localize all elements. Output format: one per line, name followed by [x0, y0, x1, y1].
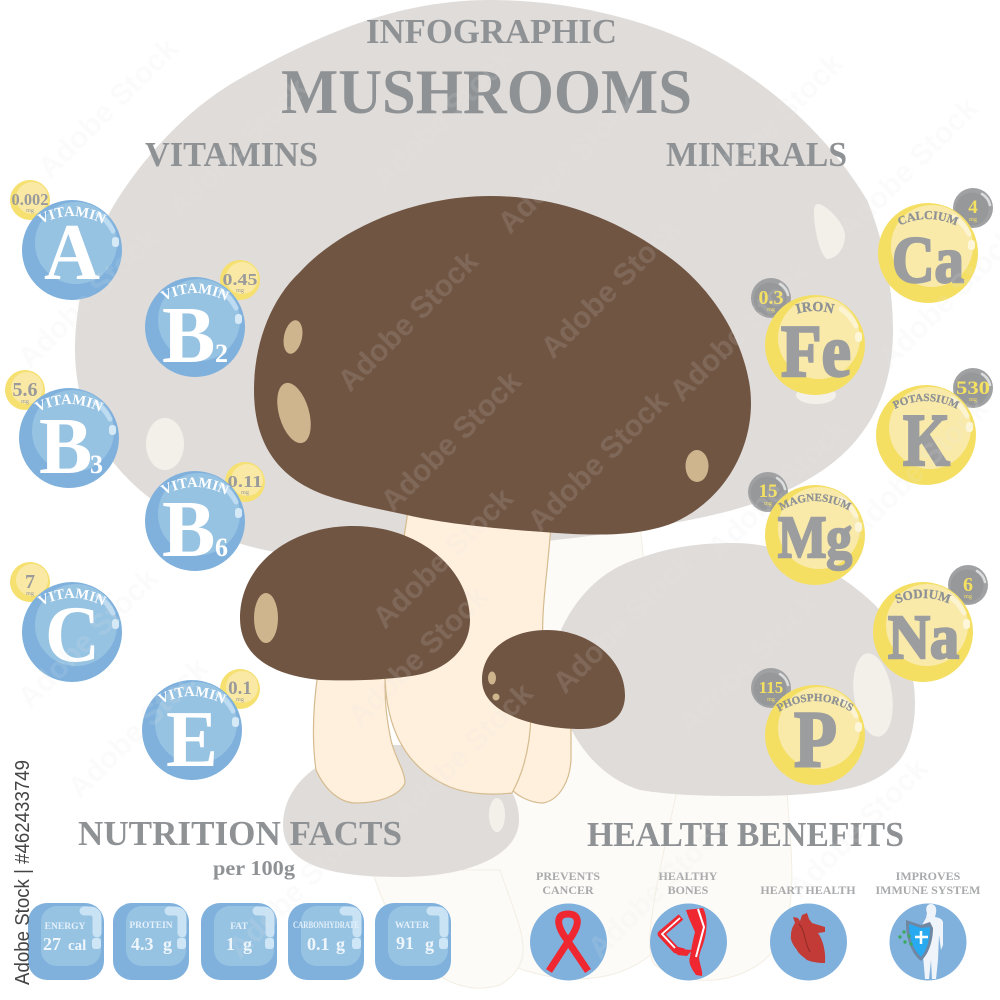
- mineral iron: IRON: [795, 302, 835, 314]
- heading: nutrition facts: NUTRITION FACTS: [78, 814, 402, 853]
- mineral calcium: 4: [968, 197, 978, 218]
- nutrition: energy: ENERGY: [45, 922, 85, 932]
- nutrition: carbohydrate: g: [336, 934, 345, 954]
- watermark: Adobe Stock: [375, 365, 528, 518]
- benefit: healthy bones: BONES: [668, 883, 709, 897]
- mineral phosphorus: P: [794, 696, 837, 784]
- benefit: immune system: IMPROVES: [896, 869, 961, 883]
- vitamin C: mg: [26, 591, 34, 597]
- vitamin E: E: [166, 696, 218, 784]
- heading: minerals: MINERALS: [666, 135, 847, 174]
- nutrition: carbohydrate: [288, 903, 364, 980]
- vitamin B2: 0.45: [222, 270, 258, 289]
- mineral phosphorus: PHOSPHORUS: [776, 694, 854, 712]
- nutrition: fat: FAT: [230, 922, 248, 932]
- vitamin B3: [5, 370, 119, 491]
- benefit: prevents cancer: CANCER: [542, 883, 594, 897]
- mineral iron: 0.3: [758, 287, 784, 309]
- vitamin B2: mg: [236, 288, 244, 294]
- right stem: [510, 720, 571, 803]
- watermark: Adobe Stock: [32, 32, 185, 185]
- nutrition: carbohydrate: CARBONHYDRATE: [293, 921, 359, 931]
- vitamin C: VITAMIN: [37, 588, 107, 606]
- title: [281, 12, 692, 127]
- nutrition: protein: PROTEIN: [129, 921, 173, 931]
- pale spots on grey caps: [146, 204, 898, 832]
- heading: vitamins: VITAMINS: [145, 135, 318, 174]
- benefit: heart health: HEART HEALTH: [760, 883, 856, 897]
- vitamin A: VITAMIN: [37, 206, 107, 224]
- vitamin B2: [145, 260, 260, 380]
- mineral sodium: SODIUM: [895, 589, 952, 604]
- mineral calcium: [878, 188, 993, 303]
- nutrition: water: 91: [396, 933, 414, 953]
- watermark: Adobe Stock: [842, 392, 995, 545]
- benefit: heart health: [760, 883, 856, 980]
- mineral iron: Fe: [781, 311, 851, 393]
- mineral potassium: mg: [969, 397, 977, 403]
- left small mushroom cap: [240, 526, 470, 680]
- mineral magnesium: mg: [764, 501, 772, 507]
- lower grey cap: [283, 745, 519, 877]
- watermark: Adobe Stock: [342, 580, 495, 733]
- vitamin A: A: [44, 209, 100, 297]
- mineral phosphorus: 115: [759, 678, 783, 697]
- tiny mushroom cap: [482, 630, 625, 729]
- large grey cap: [75, 0, 893, 554]
- watermark: Adobe Stock: [492, 87, 645, 240]
- vitamin A: 0.002: [12, 190, 48, 209]
- vitamin E: mg: [236, 697, 244, 703]
- mineral potassium: K: [903, 400, 950, 482]
- watermark: Adobe Stock: [12, 562, 165, 715]
- main mushroom stems: [313, 510, 571, 803]
- mineral magnesium: MAGNESIUM: [778, 494, 852, 510]
- benefit: healthy bones: HEALTHY: [659, 869, 718, 883]
- mineral calcium: CALCIUM: [898, 210, 959, 226]
- mineral sodium: 6: [963, 574, 973, 596]
- benefit: immune system: IMMUNE SYSTEM: [875, 883, 981, 897]
- watermark: Adobe Stock: [782, 752, 935, 905]
- small grey cap: [553, 543, 915, 796]
- mineral magnesium: Mg: [778, 504, 852, 570]
- left stem: [313, 672, 405, 803]
- vitamin E: [142, 669, 260, 784]
- vitamin B2: B: [162, 292, 215, 380]
- nutrition: energy: [28, 903, 104, 980]
- nutrition: water: g: [425, 934, 434, 954]
- nutrition: protein: 4.3: [131, 934, 154, 954]
- mineral calcium: mg: [969, 217, 977, 223]
- watermark: Adobe Stock: [222, 812, 375, 965]
- icon: arm and leg bones: [661, 908, 707, 976]
- pale background stems: [372, 525, 792, 988]
- mineral sodium: Na: [888, 604, 959, 672]
- vitamin C: C: [45, 591, 100, 679]
- vitamin B6: 0.11: [228, 472, 262, 491]
- vitamin B2: 2: [215, 339, 228, 368]
- title: MUSHROOMS: [281, 57, 692, 127]
- mineral calcium: Ca: [892, 224, 964, 297]
- main mushroom cap: [254, 196, 751, 535]
- icon: ribbon: [549, 914, 588, 971]
- watermark: Adobe Stock: [387, 677, 540, 830]
- benefit: prevents cancer: [530, 869, 607, 980]
- mineral sodium: [873, 565, 988, 682]
- mineral magnesium: 15: [758, 481, 778, 502]
- watermark: Adobe Stock: [702, 412, 855, 565]
- watermark: Adobe Stock: [162, 72, 315, 225]
- watermark: Adobe Stock: [547, 547, 700, 700]
- benefit: prevents cancer: PREVENTS: [536, 869, 600, 883]
- vitamin B3: 3: [90, 450, 103, 479]
- mineral potassium: [876, 368, 993, 485]
- watermark: Adobe Stock: [664, 255, 817, 408]
- vitamin C: [10, 562, 122, 682]
- nutrition: energy: 27: [43, 934, 61, 954]
- vitamin B2: VITAMIN: [160, 283, 230, 300]
- vitamin B3: mg: [21, 399, 29, 405]
- benefit: immune system: [875, 869, 981, 980]
- watermark: Adobe Stock: [535, 212, 688, 365]
- nutrition: fat: [201, 903, 277, 980]
- vitamin B3: 5.6: [12, 379, 38, 401]
- vitamin C: 7: [25, 571, 35, 593]
- mineral phosphorus: mg: [767, 697, 775, 703]
- watermark: Adobe Stock: [697, 47, 850, 200]
- central stem: [385, 510, 551, 794]
- vitamin B3: B: [39, 403, 92, 491]
- mineral sodium: mg: [964, 594, 972, 600]
- nutrition: protein: [113, 903, 189, 980]
- nutrition: energy: cal: [68, 938, 86, 954]
- vitamin B6: 6: [215, 533, 228, 562]
- nutrition: carbohydrate: 0.1: [307, 934, 330, 954]
- benefit: healthy bones: [650, 869, 727, 980]
- watermark: Adobe Stock: [62, 652, 215, 805]
- watermark: Adobe Stock: [672, 587, 825, 740]
- watermark: Adobe Stock: [832, 92, 985, 245]
- vitamin B6: B: [162, 486, 215, 574]
- heading: health benefits: HEALTH BENEFITS: [587, 815, 904, 854]
- mineral phosphorus: [751, 668, 865, 785]
- mineral potassium: POTASSIUM: [892, 394, 960, 409]
- vitamin B6: VITAMIN: [160, 477, 230, 494]
- nutrition: water: [375, 903, 451, 980]
- watermark: Adobe Stock: [522, 385, 675, 538]
- title: INFOGRAPHIC: [366, 12, 617, 51]
- nutrition: fat: 1: [226, 934, 235, 954]
- nutrition: water: WATER: [395, 921, 429, 931]
- vitamin E: VITAMIN: [157, 686, 227, 704]
- watermark: Adobe Stock: [367, 42, 520, 195]
- mineral potassium: 530: [956, 378, 990, 399]
- nutrition: protein: g: [163, 934, 172, 954]
- vitamin A: mg: [26, 208, 34, 214]
- subheading: per 100g: per 100g: [213, 856, 296, 880]
- watermark: Adobe Stock: [367, 482, 520, 635]
- watermark: Adobe Stock: [582, 812, 735, 965]
- nutrition: fat: g: [243, 934, 252, 954]
- vitamin B3: VITAMIN: [34, 394, 104, 412]
- stock id text: Adobe Stock | #462433749: [12, 760, 34, 985]
- mineral magnesium: [748, 472, 865, 585]
- vitamin E: 0.1: [228, 678, 252, 699]
- watermark: Adobe Stock: [332, 245, 485, 398]
- icon: heart: [791, 913, 825, 963]
- watermark: Adobe Stock: [12, 222, 165, 375]
- vitamin B6: [145, 462, 265, 574]
- mineral iron: [751, 278, 865, 395]
- vitamin A: [10, 180, 122, 300]
- mineral iron: mg: [767, 307, 775, 313]
- vitamin B6: mg: [241, 490, 249, 496]
- icon: body and shield: [898, 904, 943, 979]
